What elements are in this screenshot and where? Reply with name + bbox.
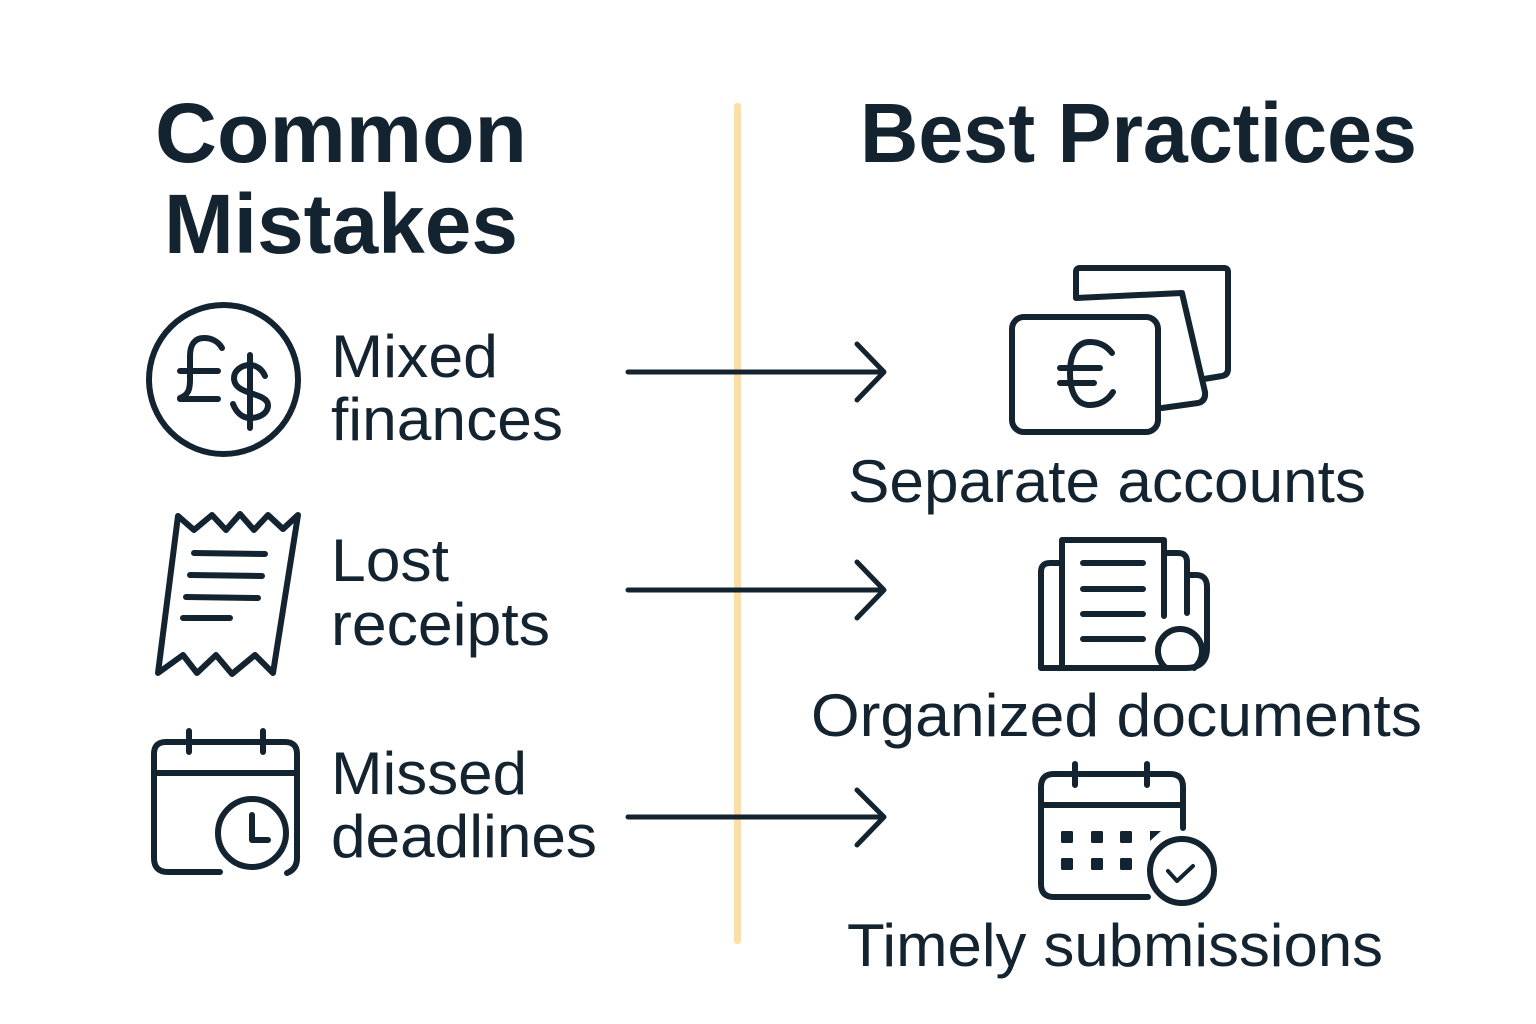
heading: Common Mistakes: Mistakes (164, 177, 518, 271)
icon: euro note with papers (1012, 268, 1228, 432)
icon: receipt (158, 514, 298, 674)
label: Mixed finances (331, 323, 563, 453)
icon: pound and dollar coin (149, 305, 298, 454)
center divider (734, 103, 741, 944)
arrow: lost receipts to organized documents (628, 562, 884, 618)
heading: Best Practices: Best Practices (860, 86, 1417, 180)
label: Mixed finances: Mixed (331, 323, 498, 390)
arrow: mixed finances to separate accounts (628, 344, 884, 400)
arrow: missed deadlines to timely submissions (628, 790, 884, 845)
label: Mixed finances: finances (331, 386, 563, 453)
label: Timely submissions: Timely submissions (847, 912, 1383, 979)
label: Missed deadlines: deadlines (331, 803, 597, 870)
label: Missed deadlines: Missed (331, 740, 527, 807)
label: Lost receipts: receipts (331, 591, 550, 658)
label: Separate accounts: Separate accounts (848, 448, 1366, 515)
label: Lost receipts (331, 527, 550, 658)
icon: organized documents (1041, 540, 1207, 668)
heading: Common Mistakes (155, 86, 527, 271)
icon: calendar with check (1041, 764, 1214, 903)
label: Organized documents: Organized documents (811, 682, 1422, 749)
label: Missed deadlines (331, 740, 597, 870)
heading: Common Mistakes: Common (155, 86, 527, 180)
icon: calendar with clock (154, 731, 297, 873)
label: Lost receipts: Lost (331, 527, 449, 594)
